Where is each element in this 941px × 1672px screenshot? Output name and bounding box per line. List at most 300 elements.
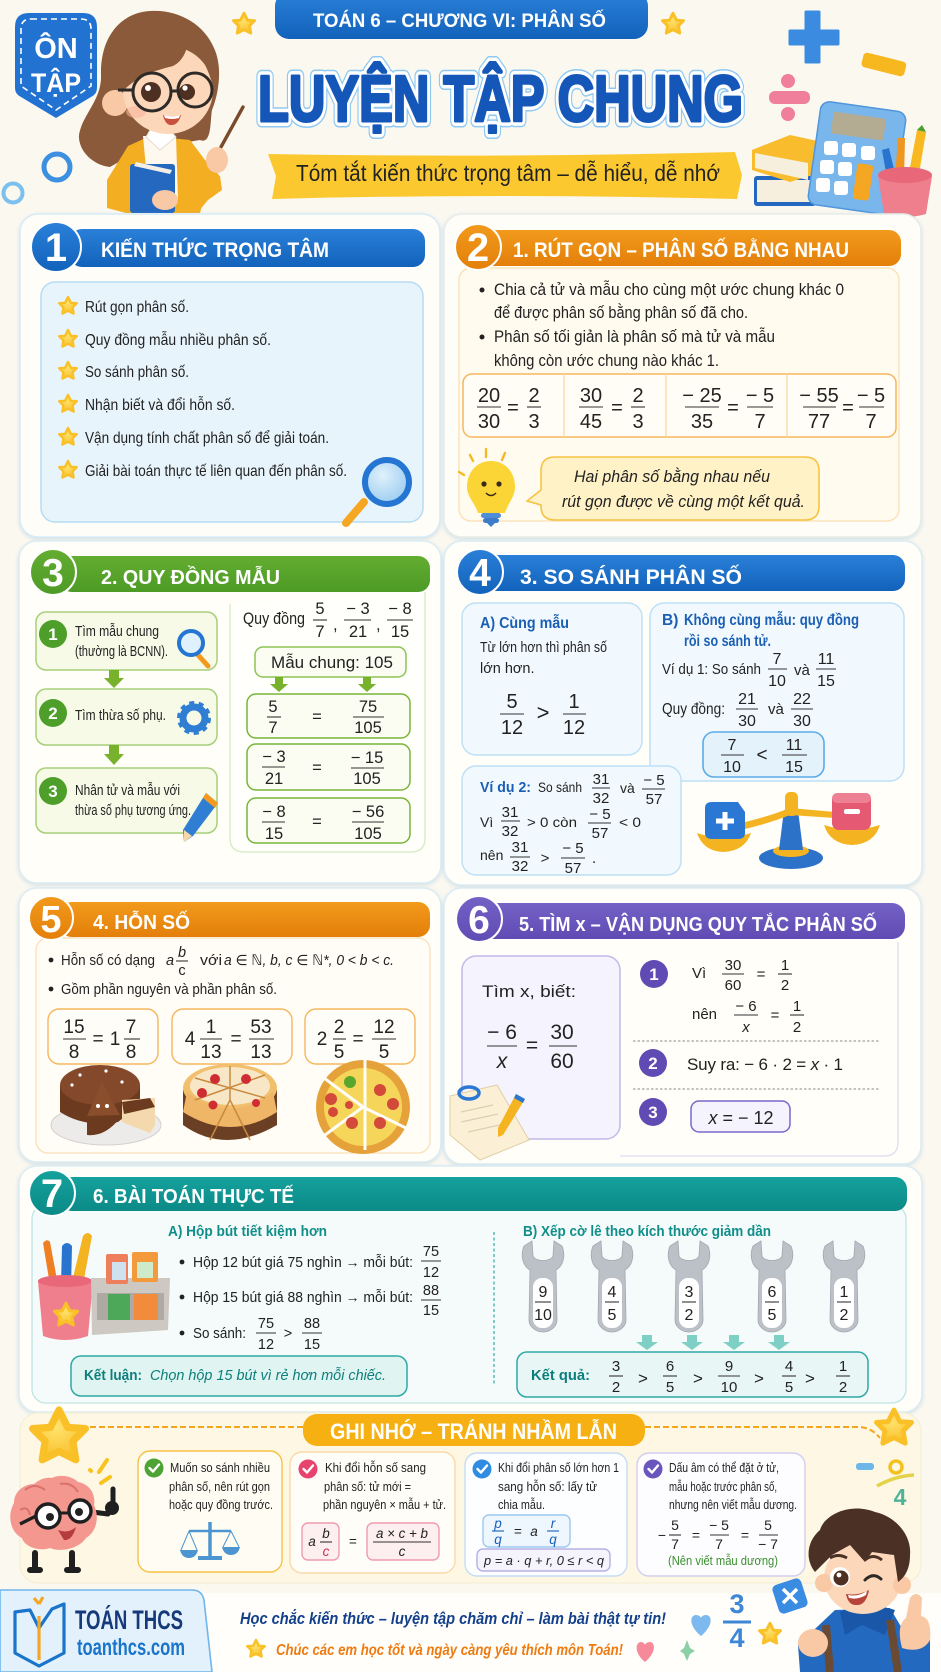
card 4: 7 [671, 1536, 679, 1552]
wrenches: 2 [685, 1307, 694, 1324]
box: ví dụ 2: 57 [592, 825, 608, 842]
right column: 15 [265, 825, 283, 843]
fraction strip: = [507, 397, 519, 419]
mixed number boxes: 5 [379, 1042, 389, 1063]
icon: decorative fraction: 4 [894, 1484, 907, 1510]
icon: blue heart [691, 1615, 711, 1636]
right column: 105 [353, 770, 381, 788]
closing message: Học chắc kiến thức – luyện tập chăm chỉ – làm bài thật tự tin! [240, 1609, 666, 1628]
part a: 88 [423, 1283, 439, 1299]
right column: 105 [354, 825, 382, 843]
part a: Hộp 12 bút giá 75 nghìn → mỗi bút: [193, 1254, 413, 1271]
part a: > [284, 1326, 292, 1342]
box b: không cùng mẫu: 30 [793, 713, 811, 730]
box b: không cùng mẫu: B) [662, 612, 678, 629]
right column: − 3 [346, 600, 370, 618]
section heading 4: 3. SO SÁNH PHÂN SỐ [520, 565, 742, 589]
card 2: a × c + b [376, 1526, 428, 1541]
fraction strip: 2 [528, 385, 540, 407]
step 1: nên [692, 1006, 717, 1023]
bullets: Phân số tối giản là phân số mà tử và mẫu [494, 327, 775, 346]
card 4: (Nên viết mẫu dương) [668, 1553, 778, 1568]
checklist box: So sánh phân số. [85, 364, 189, 381]
result box [517, 1352, 868, 1397]
part a: 15 [304, 1337, 320, 1353]
box: ví dụ 2 [462, 766, 681, 877]
icon: star right [662, 13, 684, 33]
box: ví dụ 2: < 0 [619, 814, 641, 830]
fraction strip [463, 374, 896, 437]
card 4: = [741, 1527, 749, 1543]
title: luyện tập chung: LUYỆN TẬP CHUNG [258, 62, 743, 135]
step 2: Tìm thừa số phụ. [75, 707, 166, 724]
box: ví dụ 2: − 5 [643, 772, 665, 789]
part a: 75 [423, 1244, 439, 1260]
section heading 6: 6 [468, 899, 490, 942]
part a: 75 [258, 1316, 274, 1332]
section heading 6 [456, 896, 905, 942]
result box: 3 [612, 1358, 620, 1375]
step 3: 3 [48, 782, 58, 801]
fraction strip: 45 [580, 411, 602, 433]
fraction strip: 35 [691, 411, 713, 433]
box: ví dụ 2: 57 [646, 791, 662, 808]
divider [493, 1232, 495, 1386]
mixed number boxes: 4 [185, 1029, 196, 1050]
result box: > [693, 1369, 703, 1388]
box b: không cùng mẫu: và [768, 701, 784, 718]
right column: 5 [268, 698, 278, 716]
mixed number boxes: 8 [69, 1042, 79, 1063]
checklist box: Rút gọn phân số. [85, 299, 189, 316]
arrow [104, 745, 124, 765]
icon: yellow star [759, 1623, 781, 1643]
card 3 [465, 1453, 627, 1576]
logo panel: toanthcs.com [77, 1634, 185, 1660]
card 3: p [493, 1516, 502, 1531]
box: ví dụ 2: 32 [512, 858, 528, 875]
panel: quy đồng mẫu [19, 541, 441, 883]
fraction strip: 7 [754, 411, 766, 433]
box a: cùng mẫu: 12 [563, 717, 585, 739]
step 1: 2 [793, 1019, 801, 1036]
conclusion box: Chọn hộp 15 bút vì rẻ hơn mỗi chiếc. [150, 1367, 386, 1384]
box: ví dụ 2: − 5 [589, 806, 611, 823]
icon: balance scale [697, 792, 880, 869]
mixed number boxes: 15 [63, 1017, 85, 1038]
result box: 10 [721, 1379, 737, 1396]
bullets: với [200, 953, 222, 969]
result box: 2 [839, 1379, 847, 1396]
bullets [480, 280, 844, 370]
card 2: a [308, 1534, 316, 1549]
fraction strip: 3 [632, 411, 644, 433]
card 1: phân số, nên rút gọn [169, 1480, 270, 1494]
illustration: brain character [10, 1460, 119, 1570]
mixed number boxes: 1 [110, 1029, 120, 1050]
card 3: r [551, 1516, 556, 1531]
arrows [636, 1335, 790, 1350]
card 2: phần nguyên × mẫu + tử. [323, 1497, 446, 1512]
step 2 [639, 1049, 843, 1077]
box b: không cùng mẫu: 10 [723, 759, 741, 776]
box b: không cùng mẫu: 15 [817, 673, 835, 690]
title: luyện tập chung: LUYỆN TẬP CHUNG [258, 62, 743, 135]
icon: pink heart [637, 1642, 654, 1662]
section heading 3: 3 [42, 552, 64, 595]
fraction strip: 77 [808, 411, 830, 433]
right column: Quy đồng [243, 609, 305, 628]
subtitle ribbon [268, 152, 742, 199]
mixed number boxes: 1 [206, 1017, 216, 1038]
mixed number boxes: = [92, 1029, 104, 1050]
section heading 5: 4. HỖN SỐ [93, 910, 190, 934]
icon: clipboard and pencil [450, 1085, 529, 1160]
box b: không cùng mẫu: < [756, 745, 768, 766]
fraction strip: 20 [478, 385, 500, 407]
fraction strip: 3 [528, 411, 540, 433]
step 3: 3 [648, 1103, 658, 1122]
step 1: − 6 [735, 998, 757, 1015]
panel: so sánh phân số [444, 541, 922, 885]
icon: magnifier [346, 460, 409, 523]
fraction strip: − 25 [682, 385, 722, 407]
badge: ôn tập [15, 13, 97, 118]
footer strip [0, 1508, 941, 1672]
conclusion box [71, 1356, 407, 1396]
card 3: sang hỗn số: lấy tử [498, 1479, 597, 1494]
mixed number boxes: 13 [250, 1042, 272, 1063]
icon: big star [33, 1410, 85, 1460]
section heading 5: 5 [40, 899, 62, 941]
section heading 3 [30, 549, 430, 595]
card 4: nhưng nên viết mẫu dương. [669, 1497, 797, 1512]
card 3: a [530, 1524, 538, 1539]
mixed number boxes: 2 [334, 1017, 344, 1038]
bullets: a [166, 953, 174, 969]
wish line: Chúc các em học tốt và ngày càng yêu thích môn Toán! [276, 1642, 623, 1659]
fraction strip: − 55 [799, 385, 839, 407]
fraction strip: = [611, 397, 623, 419]
wrenches: 6 [768, 1284, 777, 1301]
box b: không cùng mẫu: 15 [785, 759, 803, 776]
step 1: 1 [48, 625, 58, 644]
card 2: Khi đổi hỗn số sang [325, 1460, 426, 1475]
box b: không cùng mẫu: 22 [793, 691, 811, 708]
card 3: q [494, 1532, 502, 1547]
box a: cùng mẫu [462, 603, 642, 755]
icon: pencil cup [878, 125, 932, 217]
step 1: = [771, 1007, 780, 1024]
box a: cùng mẫu: A) Cùng mẫu [480, 613, 569, 632]
card 2: = [349, 1534, 357, 1549]
right column: 75 [359, 698, 377, 716]
problem box: 30 [550, 1021, 574, 1044]
step 1: x [741, 1019, 750, 1036]
inner area [32, 1205, 906, 1403]
panel: hỗn số [19, 888, 441, 1162]
mixed number boxes: 8 [126, 1042, 136, 1063]
right column: , [376, 616, 381, 634]
card 2: b [322, 1526, 330, 1541]
result box: > [754, 1369, 764, 1388]
box b: không cùng mẫu: 30 [738, 713, 756, 730]
wrenches: 5 [608, 1307, 617, 1324]
box a: cùng mẫu: > [537, 700, 549, 725]
card 2 [290, 1452, 455, 1573]
step 1: 1 [781, 957, 789, 974]
result box: 6 [666, 1358, 674, 1375]
step 3 [639, 1098, 790, 1132]
mixed number boxes: = [352, 1029, 364, 1050]
header [4, 0, 932, 217]
icon: plus [790, 12, 838, 62]
problem box [462, 956, 620, 1139]
right column: 105 [354, 719, 382, 737]
bullets: để được phân số bằng phân số đã cho. [494, 303, 748, 322]
box b: không cùng mẫu: rồi so sánh tử. [684, 633, 771, 650]
card 4: − [658, 1527, 666, 1543]
step 1: 1 [649, 965, 659, 984]
box: ví dụ 2: . [592, 850, 596, 867]
decorative fraction 3/4: 4 [729, 1623, 745, 1653]
right column: − 8 [388, 600, 412, 618]
step 1 [640, 957, 804, 1036]
result box: Kết quả: [531, 1367, 590, 1384]
box: ví dụ 2: 31 [512, 839, 528, 856]
box b: không cùng mẫu: và [794, 662, 810, 679]
card 1: Muốn so sánh nhiều [170, 1461, 270, 1475]
box: ví dụ 2: 32 [593, 790, 609, 807]
right column: , [333, 616, 338, 634]
icon: star left [233, 13, 255, 33]
dashed line [90, 1427, 880, 1438]
box: ví dụ 2: Vì [480, 814, 493, 830]
part a [168, 1223, 441, 1353]
section heading 2: 1. RÚT GỌN – PHÂN SỐ BẰNG NHAU [513, 238, 849, 262]
card 1 [138, 1451, 282, 1572]
icon: light bulb [459, 449, 515, 527]
card 2: c [399, 1544, 406, 1559]
card 2: phân số: tử mới = [324, 1480, 411, 1494]
section heading 6: 5. TÌM x – VẬN DỤNG QUY TẮC PHÂN SỐ [519, 912, 877, 936]
bullets [49, 945, 394, 998]
mixed number boxes: 53 [250, 1017, 272, 1038]
box b: không cùng mẫu: 11 [786, 737, 802, 754]
card 3: = [514, 1524, 522, 1539]
section heading 7 [29, 1170, 907, 1216]
right column: 15 [391, 623, 409, 641]
card 4: = [692, 1527, 700, 1543]
step 1: 2 [781, 977, 789, 994]
fraction strip: 7 [865, 411, 877, 433]
checklist box: Vận dụng tính chất phân số để giải toán. [85, 429, 329, 447]
step 2 [36, 689, 217, 745]
step 1: = [757, 966, 766, 983]
right column: 21 [265, 770, 283, 788]
inner area [36, 938, 430, 1153]
box b: không cùng mẫu: 7 [728, 737, 737, 754]
fraction strip: = [842, 397, 854, 419]
box: ví dụ 2: > 0 còn [527, 814, 577, 830]
box b: không cùng mẫu: Ví dụ 1: So sánh [662, 661, 761, 678]
section heading 1: 1 [45, 226, 67, 270]
subtitle ribbon: Tóm tắt kiến thức trọng tâm – dễ hiểu, dễ nhớ [296, 160, 720, 186]
wrenches: 5 [768, 1307, 777, 1324]
illustration: cheesecake [183, 1064, 277, 1140]
section heading 2 [455, 224, 901, 270]
box a: cùng mẫu: 5 [506, 691, 518, 713]
wrenches [522, 1241, 865, 1332]
problem box: = [526, 1034, 538, 1057]
box: ví dụ 2: nên [480, 847, 503, 863]
wrenches: 3 [685, 1284, 694, 1301]
part a: 15 [423, 1303, 439, 1319]
right column: 5 [315, 600, 325, 618]
step 1: 1 [793, 998, 801, 1015]
bullets: Gồm phần nguyên và phần phân số. [61, 982, 277, 998]
result box: 2 [612, 1379, 620, 1396]
section heading 1: KIẾN THỨC TRỌNG TÂM [101, 238, 329, 262]
panel: rút gọn [444, 214, 921, 537]
conclusion box: Kết luận: [84, 1367, 142, 1384]
top pill: course label: TOÁN 6 – CHƯƠNG VI: PHÂN SỐ [313, 10, 606, 32]
mixed number boxes: 12 [373, 1017, 395, 1038]
card 1: hoặc quy đồng trước. [169, 1498, 273, 1512]
divider [633, 1041, 879, 1089]
card 4: − 5 [709, 1517, 729, 1533]
fraction strip: 30 [478, 411, 500, 433]
right column: = [312, 759, 322, 777]
bullets: không còn ước chung nào khác 1. [494, 352, 719, 370]
checklist box: Giải bài toán thực tế liên quan đến phân số. [85, 463, 347, 480]
badge: ôn tập: ÔN [34, 31, 78, 65]
box: ví dụ 2: 57 [565, 860, 581, 877]
box: ví dụ 2: 31 [502, 804, 518, 821]
section heading 7: 7 [41, 1172, 63, 1216]
step 2: 2 [48, 704, 58, 723]
step 2: 2 [648, 1054, 658, 1073]
result box: 4 [785, 1358, 793, 1375]
logo panel: TOÁN THCS [75, 1604, 183, 1635]
callout: bubble [527, 457, 819, 520]
panel: tìm x [444, 888, 921, 1164]
part a: 12 [423, 1265, 439, 1281]
box b: không cùng mẫu: Quy đồng: [662, 701, 725, 718]
box b: không cùng mẫu: Không cùng mẫu: quy đồng [684, 612, 859, 629]
card 3: Khi đổi phân số lớn hơn 1 [498, 1461, 619, 1475]
top pill: course label [275, 0, 648, 39]
wrenches: 9 [539, 1284, 548, 1301]
card 3: p = a · q + r, 0 ≤ r < q [483, 1553, 605, 1568]
fraction strip: = [727, 397, 739, 419]
right column [230, 592, 425, 852]
icon: decorative rings [4, 154, 70, 202]
illustration: pen cup and shelf [38, 1233, 170, 1340]
fraction strip: − 5 [857, 385, 885, 407]
card 4: 7 [715, 1536, 723, 1552]
section heading 7: 6. BÀI TOÁN THỰC TẾ [93, 1185, 294, 1208]
part a: 12 [258, 1337, 274, 1353]
problem box: 60 [550, 1050, 574, 1073]
fraction strip: 2 [632, 385, 644, 407]
section heading 5 [29, 896, 430, 941]
right column: 21 [349, 623, 367, 641]
arrow [104, 670, 124, 688]
decorative fraction 3/4: 3 [729, 1589, 745, 1619]
icon: minus [861, 52, 907, 77]
mixed number boxes: 2 [317, 1029, 327, 1050]
box b: không cùng mẫu: 11 [818, 651, 834, 668]
problem box: − 6 [487, 1021, 517, 1044]
illustration: teacher girl [79, 11, 243, 213]
wrenches: 1 [840, 1284, 849, 1301]
result box: > [805, 1369, 815, 1388]
illustration: boy giving thumbs up [771, 1508, 930, 1672]
problem box: x [496, 1050, 509, 1073]
box: ví dụ 2: > [541, 850, 550, 867]
card 3: chia mẫu. [498, 1497, 545, 1512]
mixed number boxes: = [230, 1029, 242, 1050]
illustration: chocolate cake [51, 1065, 161, 1145]
title pill: GHI NHỚ – TRÁNH NHẦM LẪN [330, 1418, 617, 1444]
badge: ôn tập: TẬP [31, 67, 81, 98]
result box: 1 [839, 1358, 847, 1375]
part a: 88 [304, 1316, 320, 1332]
right column: − 56 [352, 803, 384, 821]
result box: 9 [725, 1358, 733, 1375]
step 2: Suy ra: − 6 · 2 = x · 1 [687, 1055, 843, 1074]
mixed number boxes [48, 1009, 415, 1064]
bullets: c [178, 963, 186, 979]
right column: 7 [268, 719, 278, 737]
box a: cùng mẫu: Từ lớn hơn thì phân số [480, 640, 607, 656]
icon: calculator [807, 101, 907, 216]
card 3: q [549, 1532, 557, 1547]
right column: Mẫu chung: 105 [271, 653, 393, 672]
step 1: 30 [725, 957, 741, 974]
icon: decorative fraction [856, 1461, 914, 1510]
box: ví dụ 2: và [620, 780, 635, 796]
panel: bài toán thực tế [19, 1166, 922, 1412]
step 3: thừa số phụ tương ứng. [75, 802, 191, 819]
result box: 5 [666, 1379, 674, 1396]
box b: không cùng mẫu: 10 [768, 673, 786, 690]
box b: không cùng mẫu: 21 [738, 691, 756, 708]
section heading 4: 4 [469, 552, 491, 595]
card 4: − 7 [758, 1536, 778, 1552]
part a: A) Hộp bút tiết kiệm hơn [168, 1223, 327, 1240]
problem box: Tìm x, biết: [482, 982, 576, 1001]
callout: bubble: Hai phân số bằng nhau nếu [574, 467, 771, 486]
wrenches: 4 [608, 1284, 617, 1301]
icon: green sparkle [680, 1640, 695, 1661]
part a: Hộp 15 bút giá 88 nghìn → mỗi bút: [193, 1289, 413, 1306]
panel: kiến thức trọng tâm [20, 214, 440, 537]
icon: divide [769, 74, 810, 121]
panel: ghi nhớ [10, 1410, 921, 1583]
checklist box: Nhận biết và đổi hỗn số. [85, 395, 235, 414]
section heading 3: 2. QUY ĐỒNG MẪU [101, 565, 280, 589]
logo panel [0, 1590, 212, 1672]
wrenches: 2 [840, 1307, 849, 1324]
card 4 [637, 1453, 805, 1576]
box: ví dụ 2: 31 [593, 771, 609, 788]
inner area [459, 268, 899, 521]
icon: small star [876, 1410, 912, 1443]
icon: books [752, 135, 822, 206]
box b: không cùng mẫu [650, 603, 904, 781]
